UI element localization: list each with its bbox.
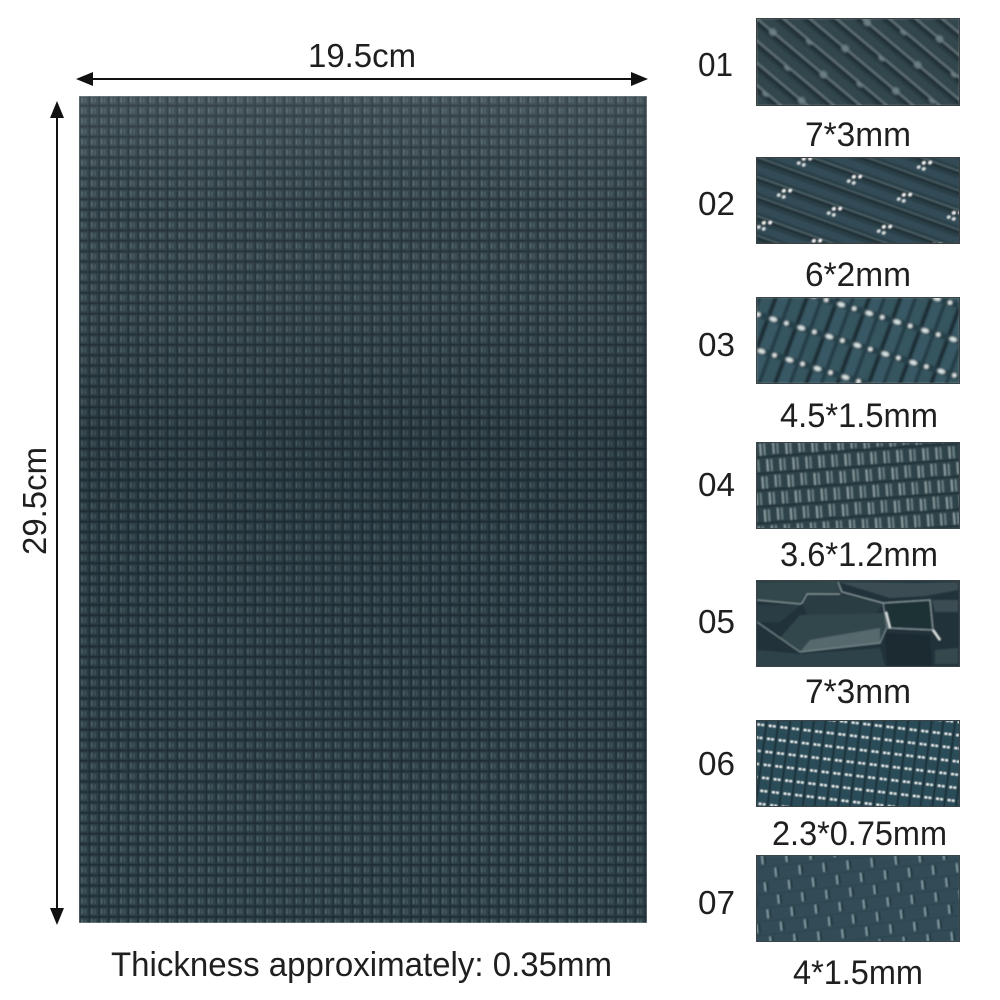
- option 03: 03: [698, 326, 735, 363]
- option 02: 6*2mm: [805, 256, 911, 294]
- option 06: [698, 720, 960, 853]
- option 06: 06: [698, 745, 735, 782]
- thickness caption: Thickness approximately: 0.35mm: [111, 946, 612, 984]
- option 04: 04: [698, 466, 735, 503]
- width label: 19.5cm: [308, 37, 416, 74]
- height label: 29.5cm: [16, 447, 53, 555]
- option 04: [698, 442, 960, 574]
- dimension arrow: height: [50, 101, 64, 925]
- dimension arrow: width: [76, 72, 648, 86]
- option 06: 2.3*0.75mm: [772, 815, 947, 853]
- option 05: 7*3mm: [805, 673, 911, 711]
- option 01: [698, 18, 960, 154]
- option 03: [698, 297, 960, 435]
- option 04: 3.6*1.2mm: [780, 536, 938, 574]
- option 02: 02: [698, 185, 735, 222]
- option 05: [698, 580, 960, 711]
- stone texture swatch: [756, 580, 960, 667]
- option 07: 07: [698, 884, 735, 921]
- option 03: 4.5*1.5mm: [780, 397, 938, 435]
- option 07: 4*1.5mm: [793, 954, 923, 992]
- option 07: [698, 855, 960, 992]
- option 02: [698, 157, 960, 294]
- option 01: 01: [698, 46, 733, 83]
- main roof tile sheet: [79, 96, 647, 923]
- option 05: 05: [698, 603, 735, 640]
- option 01: 7*3mm: [805, 116, 911, 154]
